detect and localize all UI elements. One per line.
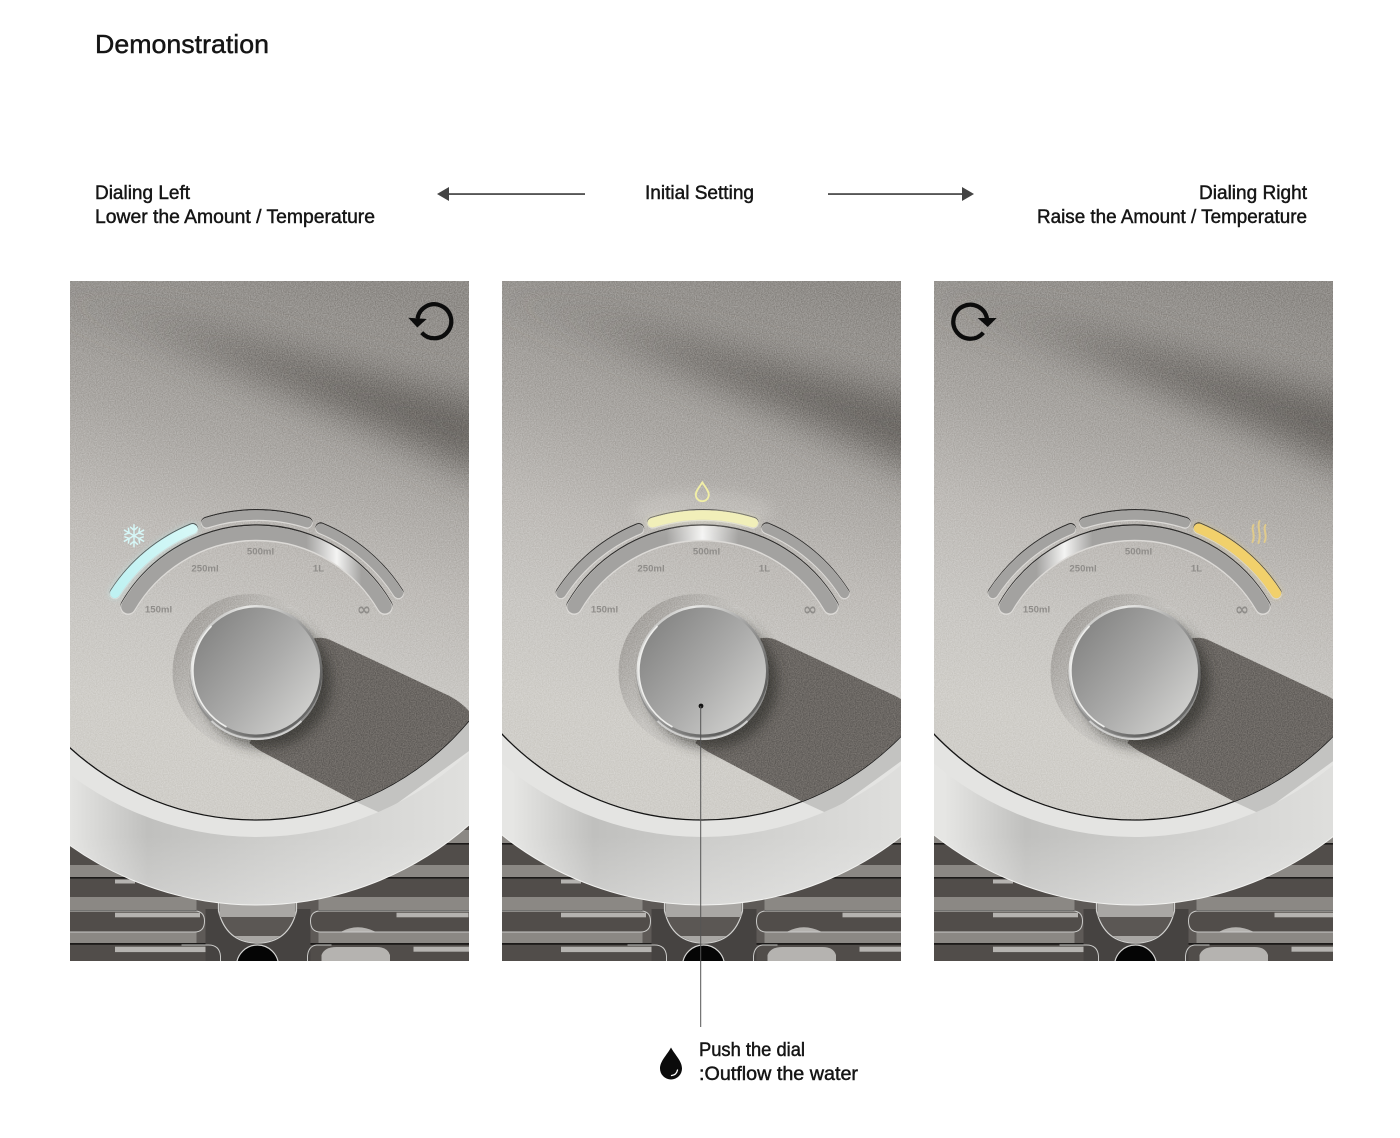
arc scale: 250ml [637,564,665,574]
arc scale: ∞ [357,600,371,620]
icon: rotate clockwise [953,305,997,339]
arc scale: 150ml [1023,604,1050,616]
text: push the dial [699,1040,859,1085]
arc scale: 1L [1191,564,1202,574]
title: Demonstration [95,29,269,59]
text: initial setting: Initial Setting [645,183,754,204]
text: dialing left: Lower the Amount / Temperature [95,207,375,228]
text: dialing left: Dialing Left [95,183,191,204]
arc scale: 500ml [693,546,720,558]
arc scale: 250ml [1069,564,1097,574]
arc scale: ∞ [803,600,817,620]
arc scale: 1L [759,564,770,574]
icon: heat waves [1252,521,1266,543]
arc scale: 500ml [1125,546,1152,558]
panel: dialing left [70,281,469,961]
text: push the dial: Push the dial [699,1040,805,1061]
text: dialing left [95,183,375,228]
callout line: push point on dial [699,704,703,1027]
arc scale [561,491,844,620]
arc scale: 150ml [591,604,618,616]
arc scale: ∞ [1235,600,1249,620]
icon: water drop outline [696,482,709,501]
icon: rotate counter-clockwise [408,304,451,338]
arc scale: 150ml [145,604,172,616]
arc scale: 1L [313,564,324,574]
icon: solid water drop [660,1048,682,1080]
arc scale: 500ml [247,546,274,558]
panel: dialing right [934,281,1333,961]
text: dialing right: Dialing Right [1199,183,1308,204]
text: push the dial: :Outflow the water [699,1064,859,1085]
text: dialing right [1037,183,1308,228]
dial and device surface [934,281,1333,961]
dial and device surface [502,281,901,961]
icon: snowflake [123,525,145,547]
panel: initial setting [502,281,901,961]
text: dialing right: Raise the Amount / Temperature [1037,207,1307,228]
dial and device surface [70,281,469,961]
arc scale [993,514,1276,620]
arrow: left [437,187,585,201]
arrow: right [828,187,974,201]
arc scale [115,514,398,620]
arc scale: 250ml [191,564,219,574]
